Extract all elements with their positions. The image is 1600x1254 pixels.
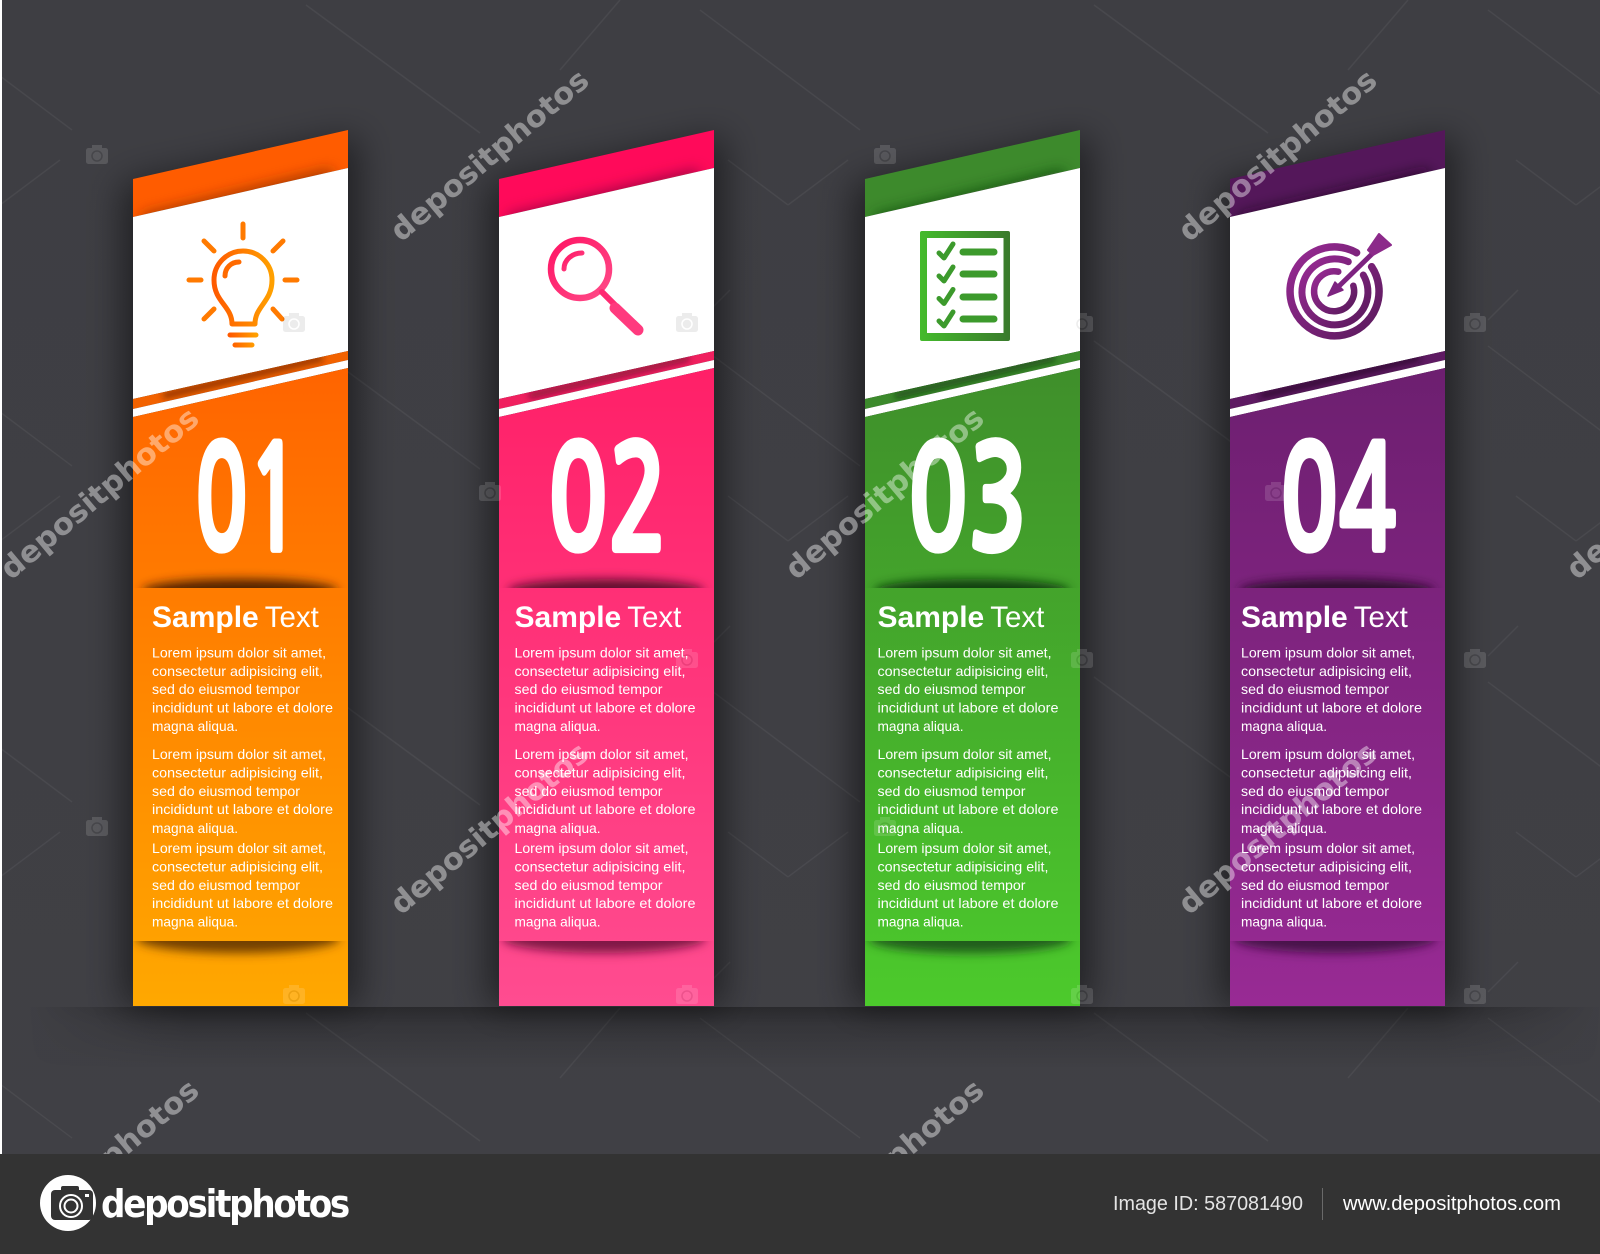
body text: sed do eiusmod tempor	[1241, 681, 1389, 697]
body text	[1241, 644, 1422, 930]
body text: Lorem ipsum dolor sit amet,	[878, 644, 1052, 660]
body text: Lorem ipsum dolor sit amet,	[878, 840, 1052, 856]
body text: magna aliqua.	[152, 914, 238, 930]
body text: consectetur adipisicing elit,	[514, 764, 686, 780]
footer logo: depositphotos	[101, 1182, 349, 1226]
watermark camera icons	[86, 145, 1486, 1004]
icon: checklist	[920, 231, 1010, 341]
body text: incididunt ut labore et dolore	[1241, 895, 1422, 911]
body text: Lorem ipsum dolor sit amet,	[1241, 644, 1415, 660]
body text: incididunt ut labore et dolore	[152, 895, 333, 911]
body text: magna aliqua.	[514, 718, 600, 734]
website: www.depositphotos.com	[1342, 1193, 1561, 1215]
body text: consectetur adipisicing elit,	[514, 858, 686, 874]
icon: target with dart	[1290, 234, 1391, 336]
body text: consectetur adipisicing elit,	[152, 663, 323, 679]
body text: Lorem ipsum dolor sit amet,	[152, 746, 326, 762]
body text: sed do eiusmod tempor	[152, 877, 300, 893]
number 03: 03	[908, 430, 1028, 572]
body text: Lorem ipsum dolor sit amet,	[514, 746, 688, 762]
panel: 01 orange	[133, 130, 348, 1006]
panel: 03 green	[865, 130, 1080, 1006]
body text: magna aliqua.	[1241, 914, 1327, 930]
body text: sed do eiusmod tempor	[878, 783, 1026, 799]
panel: 02 pink	[499, 130, 714, 1006]
footer logo	[40, 1175, 349, 1231]
body text: Lorem ipsum dolor sit amet,	[514, 644, 688, 660]
body text: magna aliqua.	[152, 820, 238, 836]
watermark overlay: depositphotos	[384, 63, 596, 249]
watermark overlay: depositphotos	[1172, 63, 1384, 249]
body text: Lorem ipsum dolor sit amet,	[152, 840, 326, 856]
body text: incididunt ut labore et dolore	[878, 700, 1059, 716]
body text: incididunt ut labore et dolore	[152, 801, 333, 817]
body text: incididunt ut labore et dolore	[1241, 700, 1422, 716]
body text: Lorem ipsum dolor sit amet,	[878, 746, 1052, 762]
body text: sed do eiusmod tempor	[1241, 877, 1389, 893]
body text: consectetur adipisicing elit,	[1241, 663, 1412, 679]
body text: incididunt ut labore et dolore	[514, 700, 696, 716]
body text: consectetur adipisicing elit,	[878, 858, 1048, 874]
body text: incididunt ut labore et dolore	[514, 801, 696, 817]
body text: consectetur adipisicing elit,	[1241, 858, 1412, 874]
body text	[878, 644, 1059, 930]
body text: consectetur adipisicing elit,	[878, 663, 1048, 679]
body text: consectetur adipisicing elit,	[1241, 764, 1412, 780]
body text: incididunt ut labore et dolore	[878, 895, 1059, 911]
body text: magna aliqua.	[1241, 718, 1327, 734]
body text: incididunt ut labore et dolore	[152, 700, 333, 716]
body text: consectetur adipisicing elit,	[152, 764, 323, 780]
body text: incididunt ut labore et dolore	[514, 895, 696, 911]
heading: Sample Text: SampleText	[878, 601, 1044, 634]
body text: magna aliqua.	[878, 914, 964, 930]
body text	[514, 644, 696, 930]
body text: sed do eiusmod tempor	[514, 783, 663, 799]
body text: consectetur adipisicing elit,	[514, 663, 686, 679]
body text: sed do eiusmod tempor	[514, 681, 663, 697]
body text: magna aliqua.	[1241, 820, 1327, 836]
body text: consectetur adipisicing elit,	[878, 764, 1048, 780]
body text: Lorem ipsum dolor sit amet,	[152, 644, 326, 660]
heading: Sample Text: SampleText	[152, 601, 319, 634]
number 01: 01	[195, 430, 301, 572]
body text: magna aliqua.	[878, 820, 964, 836]
number 04: 04	[1280, 430, 1397, 572]
body text: magna aliqua.	[514, 820, 600, 836]
watermark overlay: depositphotos	[384, 736, 596, 922]
body text: sed do eiusmod tempor	[152, 681, 300, 697]
watermark overlay: depositphotos	[1172, 736, 1384, 922]
body text: sed do eiusmod tempor	[878, 877, 1026, 893]
body text: sed do eiusmod tempor	[878, 681, 1026, 697]
floor shadow	[84, 1007, 1546, 1040]
panel shadows	[123, 136, 1455, 1006]
body text: magna aliqua.	[878, 718, 964, 734]
icon: magnifying glass	[551, 240, 638, 330]
watermark overlay: depositphotos	[779, 401, 991, 587]
watermark camera icons on white	[283, 313, 698, 332]
body text: sed do eiusmod tempor	[514, 877, 663, 893]
body text: incididunt ut labore et dolore	[878, 801, 1059, 817]
body text: magna aliqua.	[514, 914, 600, 930]
body text: Lorem ipsum dolor sit amet,	[1241, 746, 1415, 762]
body text: Lorem ipsum dolor sit amet,	[1241, 840, 1415, 856]
body text	[152, 644, 333, 930]
heading: Sample Text: SampleText	[514, 601, 681, 634]
body text: consectetur adipisicing elit,	[152, 858, 323, 874]
body text: sed do eiusmod tempor	[1241, 783, 1389, 799]
body text: magna aliqua.	[152, 718, 238, 734]
body text: incididunt ut labore et dolore	[1241, 801, 1422, 817]
footer bar	[0, 1154, 1600, 1254]
watermark overlay: depositphotos	[779, 1073, 991, 1254]
heading: Sample Text: SampleText	[1241, 601, 1408, 634]
body text: Lorem ipsum dolor sit amet,	[514, 840, 688, 856]
number 02: 02	[548, 430, 668, 572]
icon: light bulb	[189, 224, 297, 345]
body text: sed do eiusmod tempor	[152, 783, 300, 799]
image id: Image ID: 587081490	[1113, 1193, 1303, 1215]
panel: 04 purple	[1230, 130, 1445, 1006]
